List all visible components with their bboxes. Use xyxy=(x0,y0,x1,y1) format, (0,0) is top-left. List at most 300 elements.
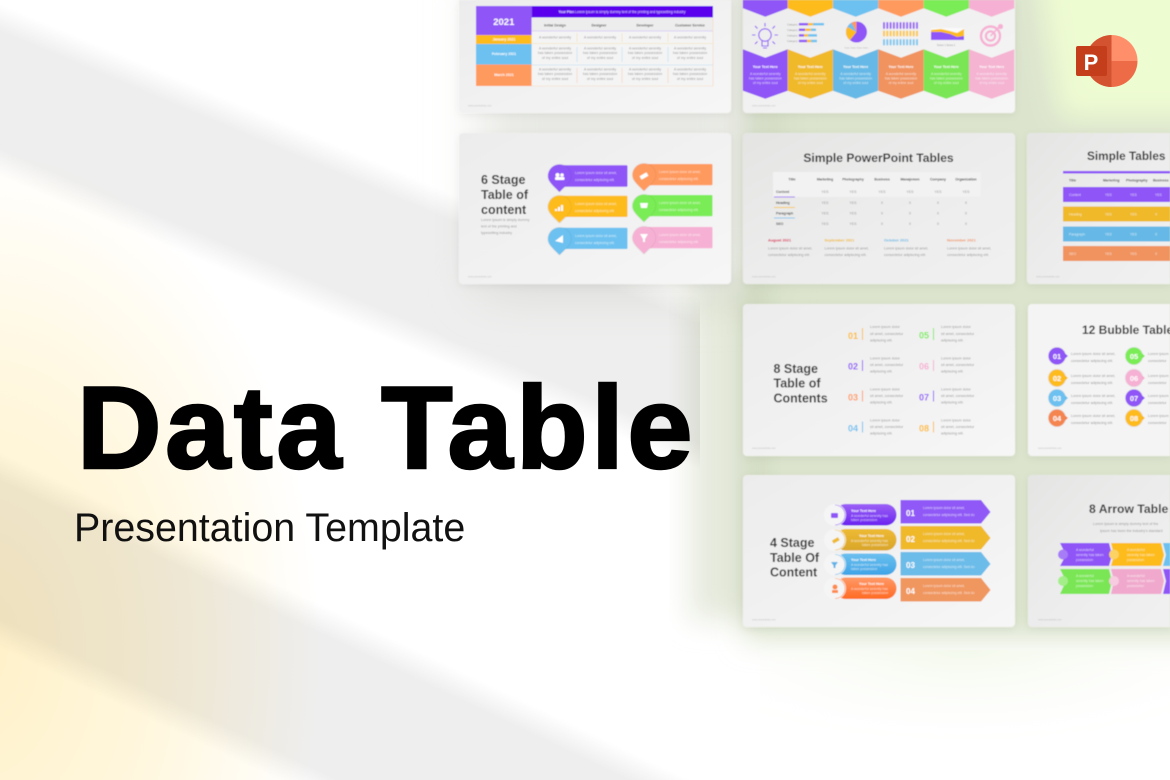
data table: X xyxy=(937,201,940,205)
icon: target xyxy=(981,24,1003,46)
header row xyxy=(1069,178,1169,182)
table body: A wonderful serenity xyxy=(584,68,616,72)
item: yellow pin: Lorem ipsum dolor sit amet, xyxy=(575,202,617,206)
bubble 03 xyxy=(1048,390,1115,406)
table body: of my entire soul xyxy=(587,77,613,81)
bubble 06: consectetur xyxy=(1148,381,1167,385)
bubble 08 xyxy=(1126,410,1169,426)
item 02 xyxy=(848,356,904,374)
item 08: Lorem ipsum dolor xyxy=(941,418,972,422)
panel: simple tables slide: www.yourwebsite.com xyxy=(1036,276,1060,278)
item 04: adipiscing elit. xyxy=(870,432,893,436)
bubble 02: consectetur adipiscing elit. xyxy=(1071,381,1113,385)
data table: SEO xyxy=(776,222,784,226)
data table: YES xyxy=(878,190,886,194)
item: blue pin xyxy=(548,228,628,255)
table body: of my entire soul xyxy=(677,56,703,60)
bubble 04: consectetur adipiscing elit. xyxy=(1071,421,1113,425)
header row: Marketing xyxy=(1103,178,1120,182)
item: orange pin: consectetur adipiscing elit. xyxy=(659,177,699,181)
column: pink: A wonderful serenity xyxy=(976,72,1007,76)
bubble 01 xyxy=(1048,348,1115,364)
data table: Heading xyxy=(776,201,790,205)
month: August 2021 xyxy=(768,238,812,257)
item 03: sit amet, consectetur xyxy=(870,394,904,398)
column: green: of my entire soul xyxy=(934,81,959,85)
data table: YES xyxy=(821,190,829,194)
data table: X xyxy=(881,212,884,216)
description: Lorem Ipsum is simply dummy xyxy=(481,218,530,222)
column: blue: A wonderful serenity xyxy=(840,72,871,76)
item: pink pin xyxy=(632,226,712,254)
description: typesetting industry. xyxy=(481,231,513,235)
arrow 01: 01 xyxy=(906,509,915,518)
arrow: yellow xyxy=(1109,543,1164,566)
table body: A wonderful serenity xyxy=(674,46,706,50)
heading: Contents xyxy=(774,392,828,406)
item 05 xyxy=(919,325,975,342)
plan header xyxy=(532,6,713,18)
column: orange: of my entire soul xyxy=(889,81,914,85)
data table: Manajemen xyxy=(900,178,920,182)
column: orange: has taken possession xyxy=(885,76,917,80)
item 01: sit amet, consectetur xyxy=(870,332,904,336)
column: orange: Your Text Here xyxy=(888,65,914,69)
column: green xyxy=(924,49,969,99)
table body: of my entire soul xyxy=(632,77,658,81)
item 08 xyxy=(919,418,975,436)
panel: 2021 plan table slide: www.yourwebsite.com xyxy=(468,104,492,108)
arrow: pink: A wonderful xyxy=(1127,574,1145,578)
arrow: pink: possession xyxy=(1127,584,1144,588)
item: green pin: consectetur adipiscing elit. xyxy=(659,208,699,212)
arrow: purple: A wonderful xyxy=(1076,548,1094,552)
bubble 02: Lorem ipsum dolor sit amet, xyxy=(1071,374,1115,378)
heading: Table of xyxy=(481,188,529,202)
column headers: Initial Design xyxy=(544,24,566,28)
row: paragraph: YES xyxy=(1130,232,1138,236)
arrow 01 xyxy=(900,500,990,524)
heading: content xyxy=(481,203,527,217)
header row: Business xyxy=(1153,178,1169,182)
month: November 2021: November 2021 xyxy=(947,238,977,242)
column: pink: Your Text Here xyxy=(979,65,1004,69)
data table: Business xyxy=(874,178,890,182)
arrow 04 xyxy=(900,578,990,602)
arrow: green: A wonderful xyxy=(1076,574,1094,578)
arrow: blue xyxy=(1163,543,1170,566)
item: yellow pin: consectetur adipiscing elit. xyxy=(575,209,615,213)
heading: 4 Stage xyxy=(770,536,815,550)
item 04: sit amet, consectetur xyxy=(870,425,904,429)
row label: March 2021: March 2021 xyxy=(494,73,514,77)
column headers: Developer xyxy=(637,24,654,28)
data table: Company xyxy=(930,178,946,182)
table body: of my entire soul xyxy=(632,56,658,60)
column: pink: of my entire soul xyxy=(979,81,1004,85)
item 06: adipiscing elit. xyxy=(941,370,964,374)
arrow: purple xyxy=(1058,543,1112,566)
bubble 06: 06 xyxy=(1130,374,1138,383)
row label: February 2021 xyxy=(476,44,532,64)
bar chart xyxy=(787,22,824,43)
arrow: purple: serenity has taken xyxy=(1076,553,1104,557)
pictogram chart: people xyxy=(884,23,917,44)
heading: 8 Arrow Table xyxy=(1089,502,1168,516)
data table: YES xyxy=(849,222,857,226)
month: September 2021: September 2021 xyxy=(824,238,855,242)
arrow: green: possession xyxy=(1076,584,1093,588)
row: paragraph: YES xyxy=(1105,232,1113,236)
table body: A wonderful serenity xyxy=(584,36,616,40)
arrow: yellow: A wonderful xyxy=(1127,548,1145,552)
column: blue: has taken possession xyxy=(839,76,872,80)
row: content: YES xyxy=(1130,193,1138,197)
item 07: Lorem ipsum dolor xyxy=(941,388,972,392)
bubble 05: Lorem ipsum xyxy=(1148,352,1169,356)
arrow: pink xyxy=(1109,569,1164,594)
panel: 12 bubble table slide: www.yourwebsite.com xyxy=(1038,447,1062,450)
item 01: Lorem ipsum dolor xyxy=(870,325,901,329)
panel: 4 stage table of content slide: www.yourwebsite.com xyxy=(752,618,776,622)
bubble 08: Lorem ipsum xyxy=(1148,414,1169,418)
year cell xyxy=(476,6,532,35)
table body: has taken possession xyxy=(628,51,662,55)
heading: 8 Stage xyxy=(774,362,818,376)
item 06: sit amet, consectetur xyxy=(941,363,975,367)
pill 3: taken possession xyxy=(851,567,877,571)
item 04: Lorem ipsum dolor xyxy=(870,418,901,422)
item 03: 03 xyxy=(848,392,858,402)
item: purple pin: Lorem ipsum dolor sit amet, xyxy=(575,171,617,175)
table body: has taken possession xyxy=(673,51,707,55)
panel: 12 bubble table slide xyxy=(1028,304,1170,456)
data table: YES xyxy=(849,190,857,194)
item 03 xyxy=(848,388,904,404)
data table: Photography xyxy=(842,178,864,182)
item: pink pin: consectetur adipiscing elit. xyxy=(659,240,699,244)
arrow 02 xyxy=(900,526,990,550)
column: yellow: of my entire soul xyxy=(798,81,823,85)
panel: hexagon columns slide xyxy=(743,0,1015,113)
pill 2: A wonderful serenity has xyxy=(851,539,888,543)
row: heading: YES xyxy=(1105,212,1113,216)
arrow 03: 03 xyxy=(906,561,915,570)
data table: X xyxy=(965,201,968,205)
table body: of my entire soul xyxy=(677,77,703,81)
column headers xyxy=(532,18,713,31)
heading: Simple PowerPoint Tables xyxy=(803,151,954,165)
month: October 2021: October 2021 xyxy=(884,238,909,242)
header rule xyxy=(1063,171,1170,174)
month: November 2021: consectetur adipiscing elit. xyxy=(947,253,989,257)
item 08: adipiscing elit. xyxy=(941,432,964,436)
pill 3: Your Text Here xyxy=(851,558,876,562)
bubble 03: Lorem ipsum dolor sit amet, xyxy=(1071,394,1115,398)
row: content xyxy=(1063,187,1170,202)
data table: Content xyxy=(776,190,790,194)
arrow 02: Lorem ipsum dolor sit amet, xyxy=(923,532,965,536)
data table: X xyxy=(881,201,884,205)
bubble 02: 02 xyxy=(1053,374,1061,383)
arrow 01: Lorem ipsum dolor sit amet, xyxy=(923,506,965,510)
description: Lorem Ipsum is simply dummy text of the xyxy=(1093,522,1158,526)
data table: Title xyxy=(788,178,796,182)
table body: has taken possession xyxy=(583,51,617,55)
table body: A wonderful serenity xyxy=(539,68,571,72)
table body: A wonderful serenity xyxy=(539,36,571,40)
data table: X xyxy=(909,212,912,216)
plan header: Your Plan Lorem Ipsum is simply dummy text of the printing and typesetting industry xyxy=(559,10,686,14)
column: purple: of my entire soul xyxy=(753,81,778,85)
table body: has taken possession xyxy=(628,72,662,76)
panel: simple PowerPoint tables slide xyxy=(743,133,1015,284)
header row: Photography xyxy=(1126,178,1148,182)
bubble 07: 07 xyxy=(1130,394,1138,403)
table body: A wonderful serenity xyxy=(629,36,661,40)
pill 4 xyxy=(824,578,896,600)
data table: X xyxy=(937,222,940,226)
row: SEO: X xyxy=(1155,252,1158,256)
item 05: Lorem ipsum dolor xyxy=(941,325,972,329)
arrow 02: consectetur adipiscing elit. Sed do xyxy=(923,539,975,543)
item: blue pin: consectetur adipiscing elit. xyxy=(575,241,615,245)
title: Data Table xyxy=(77,362,696,493)
column: pink: has taken possession xyxy=(975,76,1008,80)
item 01: 01 xyxy=(848,331,858,341)
arrow 04: 04 xyxy=(906,587,915,596)
subtitle: Presentation Template xyxy=(74,506,465,550)
pill 4: taken possession xyxy=(862,591,888,595)
pill 2: Your Text Here xyxy=(859,534,884,538)
column: purple xyxy=(743,49,788,99)
data table xyxy=(773,172,981,226)
column: yellow xyxy=(788,49,833,99)
bubble 06 xyxy=(1126,370,1169,386)
pie chart: Sales Sales Sales Sales xyxy=(845,48,869,50)
bubble 01: 01 xyxy=(1053,352,1061,361)
month: November 2021 xyxy=(947,238,991,257)
pill 1: taken possession xyxy=(851,518,877,522)
panel: 8 stage table of contents slide xyxy=(743,304,1015,456)
bubble 04: Lorem ipsum dolor sit amet, xyxy=(1071,414,1115,418)
pie chart xyxy=(845,22,869,50)
item 01 xyxy=(848,325,904,342)
column: blue xyxy=(833,49,878,99)
table body: A wonderful serenity xyxy=(629,46,661,50)
pill 2: taken possession xyxy=(862,543,888,547)
pill 1 xyxy=(824,504,896,526)
item 03: adipiscing elit. xyxy=(870,400,893,404)
data table: YES xyxy=(962,190,970,194)
item 07 xyxy=(919,388,975,404)
item: purple pin xyxy=(548,164,628,192)
table body: of my entire soul xyxy=(587,56,613,60)
month: August 2021: Lorem ipsum dolor sit amet, xyxy=(768,246,812,250)
data table: X xyxy=(937,212,940,216)
table body: A wonderful serenity xyxy=(674,36,706,40)
row: paragraph: X xyxy=(1155,232,1158,236)
month: September 2021 xyxy=(824,238,869,257)
column: blue: Your Text Here xyxy=(843,65,868,69)
table body: A wonderful serenity xyxy=(584,46,616,50)
data table: Organization xyxy=(955,178,977,182)
item 08: sit amet, consectetur xyxy=(941,425,975,429)
table body xyxy=(532,18,713,86)
item 05: sit amet, consectetur xyxy=(941,332,975,336)
item: orange pin xyxy=(632,164,712,191)
panel: 6 stage table of content slide xyxy=(459,133,731,284)
item 07: sit amet, consectetur xyxy=(941,394,975,398)
bubble 05: consectetur xyxy=(1148,359,1167,363)
data table: YES xyxy=(934,190,942,194)
column: purple: has taken possession xyxy=(749,76,782,80)
table body: A wonderful serenity xyxy=(629,68,661,72)
table body: of my entire soul xyxy=(542,56,568,60)
bubble 08: consectetur xyxy=(1148,421,1167,425)
panel: 4 stage table of content slide xyxy=(743,475,1015,627)
pill 1: A wonderful serenity has xyxy=(851,514,888,518)
column: green: A wonderful serenity xyxy=(931,72,962,76)
month: October 2021: Lorem ipsum dolor sit amet, xyxy=(884,246,928,250)
item: pink pin: Lorem ipsum dolor sit amet, xyxy=(659,233,701,237)
data table: YES xyxy=(906,190,914,194)
data table: X xyxy=(965,212,968,216)
data table: X xyxy=(881,222,884,226)
panel: simple PowerPoint tables slide: www.yourwebsite.com xyxy=(752,276,776,278)
month: October 2021 xyxy=(884,238,928,257)
row: content: YES xyxy=(1155,193,1163,197)
panel: 6 stage table of content slide: www.yourwebsite.com xyxy=(468,276,492,278)
item 07: 07 xyxy=(919,392,929,402)
table body: of my entire soul xyxy=(542,77,568,81)
row: SEO xyxy=(1063,246,1170,261)
row: SEO: YES xyxy=(1130,252,1138,256)
panel: hexagon columns slide: www.yourwebsite.com xyxy=(752,104,776,108)
table body: A wonderful serenity xyxy=(539,46,571,50)
bar chart: Category 4 xyxy=(787,39,800,43)
bubble 07: consectetur xyxy=(1148,401,1167,405)
area chart: Series 1 Series 2 xyxy=(937,44,956,47)
row label: January 2021 xyxy=(476,35,532,44)
item 06: Lorem ipsum dolor xyxy=(941,356,972,360)
pill 2 xyxy=(824,529,896,551)
bar chart: Category 1 xyxy=(787,22,800,26)
item: orange pin: Lorem ipsum dolor sit amet, xyxy=(659,170,701,174)
item: blue pin: Lorem ipsum dolor sit amet, xyxy=(575,234,617,238)
column: purple: Your Text Here xyxy=(753,65,778,69)
heading: Table Of xyxy=(770,551,820,565)
arrow: pink: serenity has taken xyxy=(1127,579,1155,583)
bubble 06: Lorem ipsum xyxy=(1148,374,1169,378)
bubble 01: Lorem ipsum dolor sit amet, xyxy=(1071,352,1115,356)
item 08: 08 xyxy=(919,424,929,434)
bubble 04 xyxy=(1048,410,1115,426)
panel: 8 arrow table slide xyxy=(1028,475,1170,627)
column: green: has taken possession xyxy=(930,76,963,80)
pill 3: A wonderful serenity has xyxy=(851,563,888,567)
arrow 04: consectetur adipiscing elit. Sed do xyxy=(923,591,975,595)
item 04: 04 xyxy=(848,424,858,434)
row: paragraph: Paragraph xyxy=(1069,232,1085,236)
data table: YES xyxy=(821,222,829,226)
item: green pin xyxy=(632,194,712,222)
arrow 01: consectetur adipiscing elit. Sed do xyxy=(923,513,975,517)
bubble 07: Lorem ipsum xyxy=(1148,394,1169,398)
bubble 04: 04 xyxy=(1053,414,1062,423)
bubble 07 xyxy=(1126,390,1169,406)
item 02: 02 xyxy=(848,362,858,372)
row: paragraph xyxy=(1063,226,1170,242)
column: orange: A wonderful serenity xyxy=(886,72,917,76)
data table: YES xyxy=(849,201,857,205)
bubble 05 xyxy=(1126,348,1169,364)
description: text of the printing and xyxy=(481,224,517,228)
item 07: adipiscing elit. xyxy=(941,400,964,404)
bubble 02 xyxy=(1048,370,1115,386)
column: blue: of my entire soul xyxy=(843,81,868,85)
data table: Paragraph xyxy=(776,212,793,216)
data table: YES xyxy=(821,212,829,216)
area chart xyxy=(931,28,964,47)
item 02: adipiscing elit. xyxy=(870,370,893,374)
bubble 01: consectetur adipiscing elit. xyxy=(1071,359,1113,363)
month: October 2021: consectetur adipiscing elit. xyxy=(884,253,926,257)
item 06 xyxy=(919,356,975,374)
row label: February 2021: February 2021 xyxy=(492,52,516,56)
column: yellow: A wonderful serenity xyxy=(795,72,826,76)
item 02: Lorem ipsum dolor xyxy=(870,356,901,360)
bar chart: Category 3 xyxy=(787,34,800,38)
arrow: violet xyxy=(1163,569,1170,594)
column: yellow: has taken possession xyxy=(794,76,827,80)
item 02: sit amet, consectetur xyxy=(870,363,904,367)
table body: A wonderful serenity xyxy=(674,68,706,72)
column headers: Customer Service xyxy=(675,24,705,28)
row label: March 2021 xyxy=(476,64,532,86)
table body: has taken possession xyxy=(538,72,572,76)
item 01: adipiscing elit. xyxy=(870,338,893,342)
data table: Marketing xyxy=(817,178,833,182)
arrow 03: consectetur adipiscing elit. Sed do xyxy=(923,565,975,569)
column: orange xyxy=(878,49,924,99)
row: SEO: SEO xyxy=(1069,252,1077,256)
data table: YES xyxy=(849,212,857,216)
row: heading: Heading xyxy=(1069,212,1082,216)
heading: Table of xyxy=(774,376,821,390)
heading: Content xyxy=(770,566,818,580)
bubble 08: 08 xyxy=(1130,414,1138,423)
pill 4: Your Text Here xyxy=(859,582,884,586)
column: purple: A wonderful serenity xyxy=(750,72,781,76)
arrow 04: Lorem ipsum dolor sit amet, xyxy=(923,584,965,588)
table body: has taken possession xyxy=(673,72,707,76)
table body: has taken possession xyxy=(583,72,617,76)
panel: 8 arrow table slide: www.yourwebsite.com xyxy=(1038,618,1062,622)
bar chart: Category 2 xyxy=(787,28,800,32)
panel: 2021 plan table slide xyxy=(459,0,731,113)
item 04 xyxy=(848,418,904,436)
month: September 2021: Lorem ipsum dolor sit amet, xyxy=(824,246,869,250)
column headers: Designer xyxy=(592,24,607,28)
arrow: green: serenity has taken xyxy=(1076,579,1104,583)
item: yellow pin xyxy=(548,196,628,223)
data table: X xyxy=(909,201,912,205)
item 05: 05 xyxy=(919,330,929,340)
row: content: YES xyxy=(1105,193,1113,197)
data table: X xyxy=(965,222,968,226)
arrow: yellow: serenity has taken xyxy=(1127,553,1155,557)
